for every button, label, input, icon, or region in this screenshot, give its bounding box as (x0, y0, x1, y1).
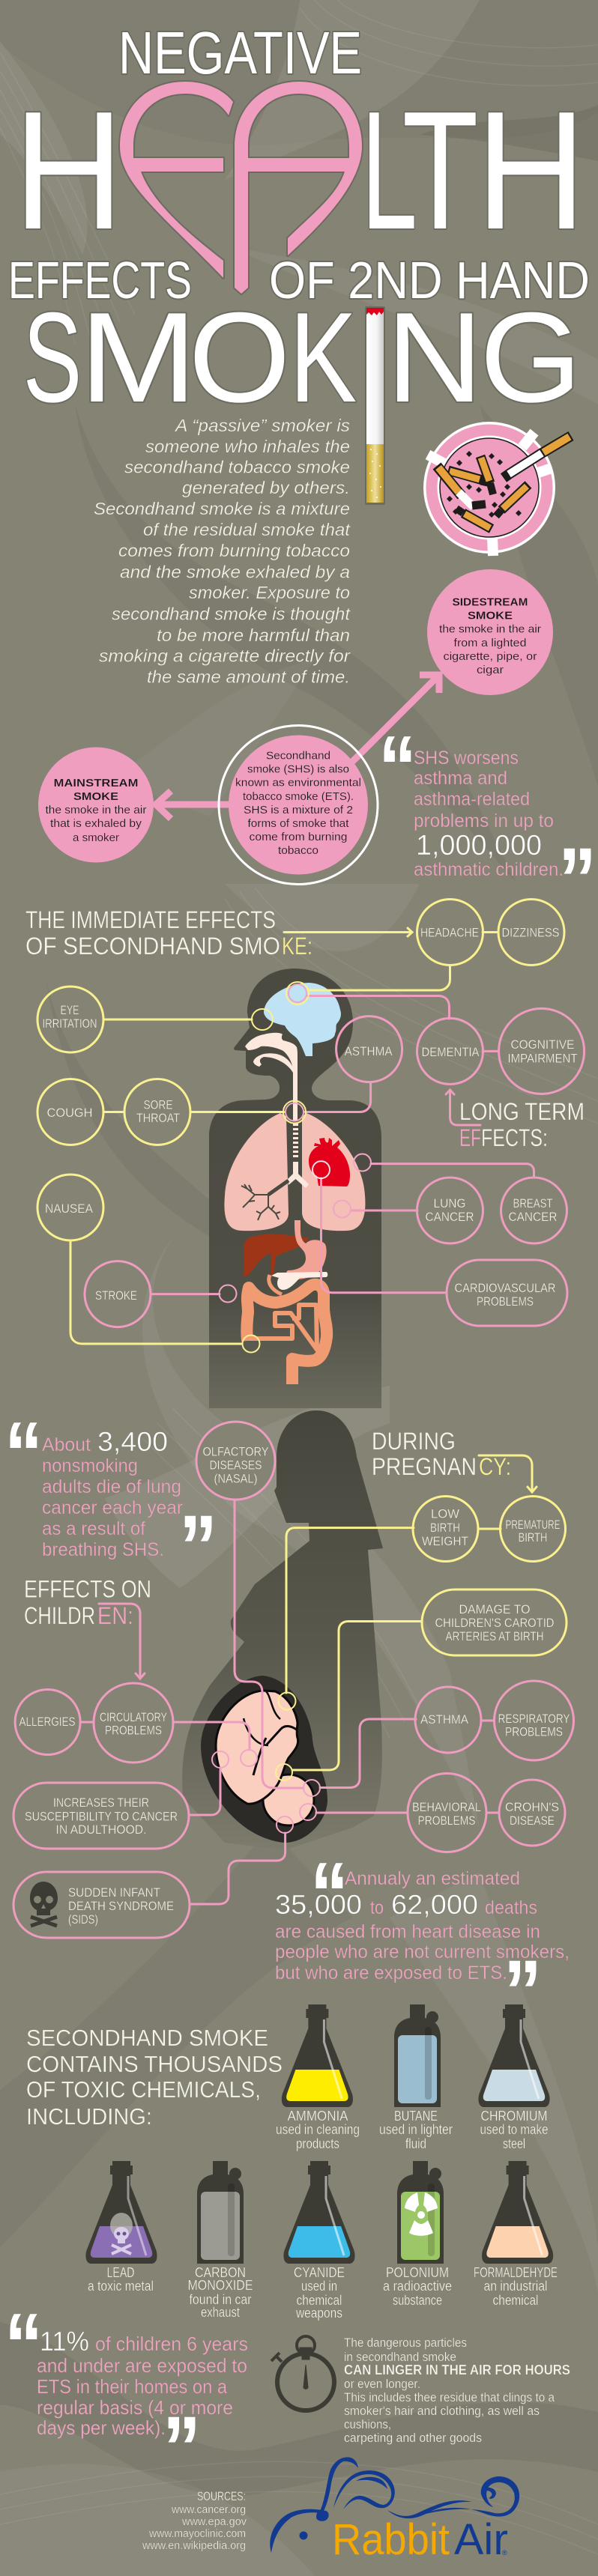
quote: asthma: “ (378, 718, 417, 818)
bubble: nausea (37, 1175, 103, 1240)
callout: secondhand smoke definition: forms of smoke that (247, 817, 349, 830)
title letter H: H (13, 76, 124, 264)
intro paragraph: secondhand tobacco smoke (124, 457, 350, 476)
bubble: low birth weight: BIRTH (430, 1521, 460, 1535)
quote: asthma: asthma-related (414, 789, 530, 810)
label: ammonia (276, 2109, 360, 2151)
quote: children exposed: of children 6 years (95, 2333, 248, 2355)
label: lead: LEAD (106, 2265, 135, 2280)
label: butane (379, 2109, 453, 2151)
heading: effects on children (24, 1576, 151, 1629)
quote: heart disease deaths: “ (310, 1844, 348, 1945)
bubble: sudden infant death syndrome: DEATH SYNDROME (68, 1899, 174, 1913)
text: lingering particles: cushions, (344, 2417, 391, 2431)
intro paragraph: Secondhand smoke is a mixture (94, 499, 350, 518)
label: cyanide (294, 2265, 345, 2321)
label: ammonia: products (296, 2136, 339, 2151)
quote: asthma (378, 718, 597, 930)
arrow: pregnancy down (479, 1455, 537, 1492)
arrow: children down (99, 1604, 145, 1679)
title letters LTH: L (361, 76, 417, 264)
intro paragraph: smoker. Exposure to (189, 583, 350, 602)
intro paragraph: comes from burning tobacco (118, 541, 350, 560)
bubble: cognitive impairment: IMPAIRMENT (508, 1052, 577, 1065)
heading: long term effects (459, 1098, 585, 1151)
callout: sidestream smoke: cigarette, pipe, or (444, 650, 537, 663)
callout: sidestream smoke: SIDESTREAM (453, 596, 528, 608)
sources: www.cancer.org (171, 2503, 246, 2516)
quote: heart disease deaths (275, 1844, 570, 2042)
heading: during pregnancy: PREGNAN (372, 1453, 477, 1480)
quote: lung cancer deaths: breathing SHS. (42, 1539, 164, 1560)
title word: smoking: O (189, 286, 291, 429)
quote: heart disease deaths: are caused from heart disease in (275, 1921, 540, 1942)
quote: heart disease deaths: ” (504, 1942, 542, 2042)
label: chromium (480, 2109, 549, 2151)
organ: stomach (286, 1220, 327, 1279)
bubble: circulatory problems (94, 1683, 173, 1763)
heading: immediate effects (25, 906, 312, 960)
bubble: cancer susceptibility: IN ADULTHOOD. (55, 1822, 147, 1837)
bubble: lung cancer: CANCER (426, 1210, 474, 1224)
bubble: respiratory problems: RESPIRATORY (498, 1712, 570, 1726)
organ: intestines (247, 1275, 327, 1384)
intro paragraph: the same amount of time. (147, 667, 350, 686)
heading: during pregnancy: CY: (479, 1453, 511, 1480)
bubble: respiratory problems (495, 1681, 574, 1760)
label: formaldehyde: FORMALDEHYDE (474, 2265, 558, 2280)
quote: children exposed: ETS in their homes on a (37, 2375, 227, 2398)
bubble: sore throat (124, 1079, 190, 1145)
icon: ashtray (423, 422, 571, 556)
bubble: cognitive impairment: COGNITIVE (511, 1037, 574, 1052)
quote: children exposed: 11% (40, 2326, 89, 2357)
quote: children exposed: “ (4, 2295, 43, 2395)
label: chromium: used to make (480, 2122, 549, 2137)
title letters LTH: T (402, 76, 478, 264)
callout: mainstream smoke (38, 748, 154, 863)
bubble: low birth weight: LOW (431, 1507, 459, 1521)
bubble: eye irritation: EYE (60, 1003, 79, 1017)
bubble: damage to carotid arteries: CHILDREN'S CAROTID (435, 1616, 555, 1630)
bottle: polonium (397, 2161, 444, 2264)
bubble: cardiovascular problems: CARDIOVASCULAR (454, 1281, 556, 1295)
bubble: cancer susceptibility (13, 1783, 189, 1849)
title word: smoking: G (480, 286, 582, 429)
bubble: sore throat: THROAT (136, 1111, 180, 1125)
bubble: headache: HEADACHE (420, 925, 479, 939)
bubble: cardiovascular problems: PROBLEMS (477, 1294, 534, 1309)
heading: toxic chemicals: CONTAINS THOUSANDS (26, 2051, 283, 2077)
bubble: damage to carotid arteries: ARTERIES AT BIRTH (445, 1629, 544, 1643)
quote: lung cancer deaths: adults die of lung (42, 1476, 181, 1497)
anatomy: organs (224, 983, 365, 1384)
flask: ammonia (282, 2004, 353, 2107)
bubble: cardiovascular problems (447, 1260, 567, 1326)
title line: negative: NEGATIVE (118, 19, 362, 86)
organ: liver (243, 1234, 309, 1276)
heading: during pregnancy: DURING (372, 1428, 456, 1455)
bubble: allergies (15, 1690, 80, 1754)
silhouette: pregnant woman (182, 1410, 383, 1850)
intro paragraph: secondhand smoke is thought (112, 604, 351, 623)
organ: airway (245, 1033, 309, 1188)
callout: mainstream smoke: MAINSTREAM (54, 777, 138, 790)
label: carbon monoxide: CARBON (195, 2265, 246, 2280)
intro paragraph: smoking a cigarette directly for (99, 646, 351, 665)
arrow: long term up (446, 1090, 480, 1125)
bubble: stroke: STROKE (95, 1288, 137, 1303)
quote: children exposed (4, 2295, 248, 2499)
text: lingering particles: carpeting and other goods (344, 2431, 482, 2445)
heading: immediate effects: OF SECONDHAND SMO (25, 933, 280, 960)
heart shaped EA (120, 82, 362, 294)
quote: asthma: problems in up to (414, 810, 554, 831)
callout: secondhand smoke definition: known as environmental (235, 777, 361, 790)
heading: long term effects: LONG TERM (459, 1098, 585, 1125)
bubble: low birth weight: WEIGHT (422, 1534, 468, 1548)
label: cyanide: CYANIDE (294, 2265, 345, 2280)
bubble: low birth weight (413, 1497, 478, 1561)
label: carbon monoxide (187, 2265, 253, 2320)
text: lingering particles: or even longer. (344, 2377, 420, 2391)
bubble: cancer susceptibility: INCREASES THEIR (53, 1795, 149, 1810)
title word: smoking: M (79, 286, 197, 429)
callout: sidestream smoke: from a lighted (454, 637, 526, 649)
bubble: asthma: ASTHMA (345, 1044, 393, 1058)
heading: toxic chemicals: OF TOXIC CHEMICALS, (26, 2076, 261, 2103)
bubble: sudden infant death syndrome: SUDDEN INFANT (68, 1885, 160, 1900)
bubble: circulatory problems: CIRCULATORY (100, 1710, 167, 1724)
callout: secondhand smoke definition: tobacco (278, 844, 318, 857)
intro paragraph: and the smoke exhaled by a (120, 562, 350, 581)
logo: rabbit air (270, 2457, 519, 2564)
quote: children exposed: ” (163, 2398, 201, 2499)
bubble: damage to carotid arteries: DAMAGE TO (459, 1602, 531, 1616)
logo wordmark: Rabbit (332, 2515, 450, 2564)
label: formaldehyde: an industrial (484, 2279, 547, 2294)
connectors: pregnancy (286, 1528, 501, 1770)
quote: heart disease deaths: to (370, 1897, 384, 1918)
label: polonium: substance (393, 2293, 442, 2308)
connectors: yellow brain and throat (70, 932, 498, 1344)
intro paragraph: to be more harmful than (157, 625, 350, 645)
label: lead: a toxic metal (88, 2279, 154, 2294)
label: polonium: a radioactive (383, 2279, 452, 2294)
label: cyanide: used in (301, 2279, 337, 2294)
arrow: to sidestream (351, 675, 439, 763)
organ: brain (264, 983, 341, 1056)
intro paragraph (94, 416, 351, 686)
bubble: behavioral problems (408, 1774, 486, 1852)
sources (142, 2489, 247, 2552)
callout: mainstream smoke: that is exhaled by (50, 817, 142, 830)
bottle: butane (394, 2004, 441, 2107)
flask: chromium (478, 2004, 550, 2107)
bubble: lung cancer (417, 1178, 483, 1243)
label: chromium: steel (503, 2136, 525, 2151)
heading: toxic chemicals: SECONDHAND SMOKE (26, 2025, 268, 2051)
bubble: dementia (417, 1018, 483, 1084)
quote: heart disease deaths: but who are exposed to ETS. (275, 1963, 507, 1983)
arrow: to headache (284, 928, 412, 936)
bubble: sore throat: SORE (144, 1098, 172, 1112)
bubble: breast cancer (501, 1178, 567, 1243)
organ: bronchial tree (241, 1181, 289, 1220)
callout: secondhand smoke definition: come from burning (249, 831, 348, 843)
callout: mainstream smoke: the smoke in the air (45, 804, 147, 816)
sources: www.epa.gov (181, 2515, 247, 2528)
intro paragraph: someone who inhales the (145, 437, 350, 456)
arrow: to mainstream (156, 791, 229, 819)
quote: asthma: asthmatic children. (414, 859, 564, 880)
title letters LTH (361, 76, 586, 264)
label: carbon monoxide: exhaust (201, 2305, 240, 2320)
text: lingering particles (344, 2336, 570, 2445)
label: polonium (383, 2265, 452, 2308)
bubble: damage to carotid arteries (422, 1589, 567, 1655)
title word: smoking: N (386, 286, 483, 429)
icon: stopwatch (271, 2336, 334, 2410)
label: butane: fluid (405, 2136, 426, 2151)
label: ammonia: used in cleaning (276, 2122, 360, 2137)
label: chromium: CHROMIUM (481, 2109, 547, 2124)
flask: lead (85, 2161, 157, 2264)
bubble: cancer susceptibility: SUSCEPTIBILITY TO CANCER (25, 1810, 178, 1824)
callout: secondhand smoke definition: tobacco smoke (ETS). (243, 790, 354, 803)
organ: pancreas (271, 1272, 327, 1290)
callout: mainstream smoke: SMOKE (73, 790, 118, 803)
quote: lung cancer deaths: as a result of (42, 1518, 145, 1539)
intro paragraph: A “passive” smoker is (174, 416, 351, 435)
title word: smoking: K (289, 286, 357, 429)
bubble: circulatory problems: PROBLEMS (105, 1723, 162, 1738)
bubble: sudden infant death syndrome (13, 1872, 190, 1938)
quote: heart disease deaths: Annualy an estimated (345, 1868, 520, 1889)
text: lingering particles: The dangerous particles (344, 2336, 467, 2350)
flask: cyanide (283, 2161, 355, 2264)
bottle: carbon monoxide (197, 2161, 244, 2264)
quote: asthma: SHS worsens (414, 748, 519, 769)
bubble: dizziness (498, 899, 564, 965)
heading: immediate effects: THE IMMEDIATE EFFECTS (25, 906, 276, 933)
heading: effects on children: EN: (97, 1602, 133, 1629)
text: lingering particles: in secondhand smoke (344, 2350, 456, 2364)
callout: sidestream smoke: SMOKE (468, 610, 513, 622)
illustration: fetus (216, 1691, 314, 1825)
title line: effects: EFFECTS (8, 251, 192, 309)
intro paragraph: generated by others. (182, 478, 350, 497)
organ: lungs (224, 1113, 365, 1231)
heading: toxic chemicals: INCLUDING: (26, 2103, 152, 2130)
quote: lung cancer deaths (4, 1404, 217, 1597)
icon: cigarette (365, 306, 385, 505)
label: cyanide: weapons (295, 2306, 342, 2321)
quote: heart disease deaths: people who are not current smokers, (275, 1942, 570, 1963)
callout: secondhand smoke definition: SHS is a mixture of 2 (244, 804, 353, 816)
quote: children exposed: days per week). (37, 2416, 166, 2439)
sources: SOURCES: (197, 2489, 246, 2503)
bubble: behavioral problems: PROBLEMS (418, 1813, 475, 1828)
bubble: dizziness: DIZZINESS (502, 925, 559, 939)
label: butane: BUTANE (394, 2109, 438, 2124)
callout: sidestream smoke: cigar (477, 664, 504, 676)
bubble: breast cancer: BREAST (513, 1196, 553, 1210)
label: cyanide: chemical (297, 2293, 342, 2308)
quote: lung cancer deaths: cancer each year (42, 1497, 183, 1518)
heading: immediate effects: KE: (282, 933, 312, 960)
heading: during pregnancy (372, 1428, 511, 1480)
text: lingering particles: This includes thee residue that clings to a (344, 2390, 555, 2404)
callout: sidestream smoke (427, 569, 553, 695)
connectors: pink brain and lungs (151, 996, 534, 1294)
markers: fetus spots (212, 1693, 320, 1833)
bubble: premature birth: BIRTH (519, 1530, 547, 1545)
markers: anatomy spots (219, 982, 371, 1353)
title (8, 19, 590, 429)
label: formaldehyde (474, 2265, 558, 2308)
bubble: crohn's disease: CROHN'S (505, 1800, 559, 1814)
bubble: allergies: ALLERGIES (19, 1715, 75, 1729)
label: formaldehyde: chemical (493, 2293, 538, 2308)
body silhouette (209, 969, 381, 1408)
heading: long term effects: FECTS: (481, 1124, 548, 1151)
intro paragraph: of the residual smoke that (143, 520, 351, 539)
heading: long term effects: EF (459, 1124, 481, 1151)
logo mark: rabbit swirl (270, 2457, 519, 2553)
bubble: cough (37, 1079, 103, 1145)
callout: mainstream smoke: a smoker (73, 831, 119, 844)
bubble: premature birth: PREMATURE (505, 1518, 561, 1532)
callout: secondhand smoke definition (219, 725, 378, 884)
text: lingering particles: CAN LINGER IN THE AIR FOR HOURS (344, 2363, 570, 2378)
bubble: olfactory diseases: DISEASES (210, 1458, 262, 1473)
bubble: breast cancer: CANCER (508, 1210, 558, 1224)
bubble: crohn's disease: DISEASE (510, 1813, 555, 1828)
title letters LTH: H (476, 76, 586, 264)
bubble: eye irritation (37, 987, 103, 1052)
quote: children exposed: and under are exposed to (37, 2354, 247, 2377)
title word: smoking: S (23, 286, 82, 429)
callout: secondhand smoke definition: smoke (SHS) is also (247, 763, 349, 776)
bubble: eye irritation: IRRITATION (42, 1016, 97, 1031)
organ: heart (309, 1138, 350, 1187)
heading: toxic chemicals (26, 2025, 283, 2130)
quote: lung cancer deaths: ” (179, 1497, 217, 1597)
quote: lung cancer deaths: nonsmoking (42, 1455, 138, 1476)
icon: skull and crossbones (30, 1882, 58, 1926)
text: lingering particles: smoker's hair and clothing, as well as (344, 2404, 540, 2418)
quote: asthma: asthma and (414, 768, 507, 789)
label: butane: used in lighter (379, 2122, 453, 2137)
label: lead (88, 2265, 154, 2294)
label: carbon monoxide: MONOXIDE (187, 2278, 253, 2293)
bubble: crohn's disease (499, 1780, 565, 1846)
logo wordmark: Air (454, 2515, 508, 2564)
bubble: lung cancer: LUNG (433, 1196, 466, 1210)
bubble: behavioral problems: BEHAVIORAL (412, 1800, 481, 1814)
callout: sidestream smoke: the smoke in the air (439, 623, 541, 635)
quote: heart disease deaths: 62,000 (391, 1889, 478, 1920)
sources: www.mayoclinic.com (148, 2527, 246, 2540)
bubble: sudden infant death syndrome: (SIDS) (68, 1912, 98, 1927)
quote: lung cancer deaths: 3,400 (97, 1426, 168, 1457)
bubble: dementia: DEMENTIA (421, 1045, 480, 1059)
bubble: headache (417, 899, 483, 965)
sources: www.en.wikipedia.org (142, 2539, 246, 2552)
bubble: asthma in children: ASTHMA (420, 1712, 469, 1727)
connectors: children (80, 1500, 499, 1904)
icon: radiation (405, 2192, 438, 2236)
quote: heart disease deaths: 35,000 (275, 1889, 362, 1920)
quote: children exposed: regular basis (4 or more (37, 2396, 233, 2419)
label: carbon monoxide: found in car (189, 2292, 252, 2307)
bubble: nausea: NAUSEA (45, 1201, 94, 1216)
callout: secondhand smoke definition: Secondhand (266, 749, 330, 763)
bubble: asthma in children (415, 1687, 481, 1753)
label: ammonia: AMMONIA (288, 2109, 348, 2124)
bubble: olfactory diseases: OLFACTORY (202, 1445, 268, 1459)
bubble: cough: COUGH (46, 1106, 93, 1120)
flask: formaldehyde (482, 2161, 553, 2264)
title word: smoking (23, 286, 582, 429)
quote: lung cancer deaths: “ (4, 1404, 43, 1504)
bubble: premature birth (501, 1497, 565, 1561)
heading: effects on children: CHILDR (24, 1602, 95, 1629)
quote: lung cancer deaths: About (42, 1434, 91, 1455)
quote: asthma: 1,000,000 (416, 830, 542, 861)
bubble: olfactory diseases (196, 1422, 275, 1500)
bubble: cognitive impairment (499, 1008, 585, 1094)
bubble: respiratory problems: PROBLEMS (505, 1724, 563, 1739)
label: polonium: POLONIUM (386, 2265, 449, 2280)
quote: heart disease deaths: deaths (485, 1897, 537, 1918)
heading: effects on children: EFFECTS ON (24, 1576, 151, 1603)
bubble: stroke (85, 1261, 151, 1327)
bubble: olfactory diseases: (NASAL) (214, 1472, 258, 1486)
bubble: asthma (336, 1016, 402, 1082)
logo wordmark: ® (502, 2549, 507, 2557)
